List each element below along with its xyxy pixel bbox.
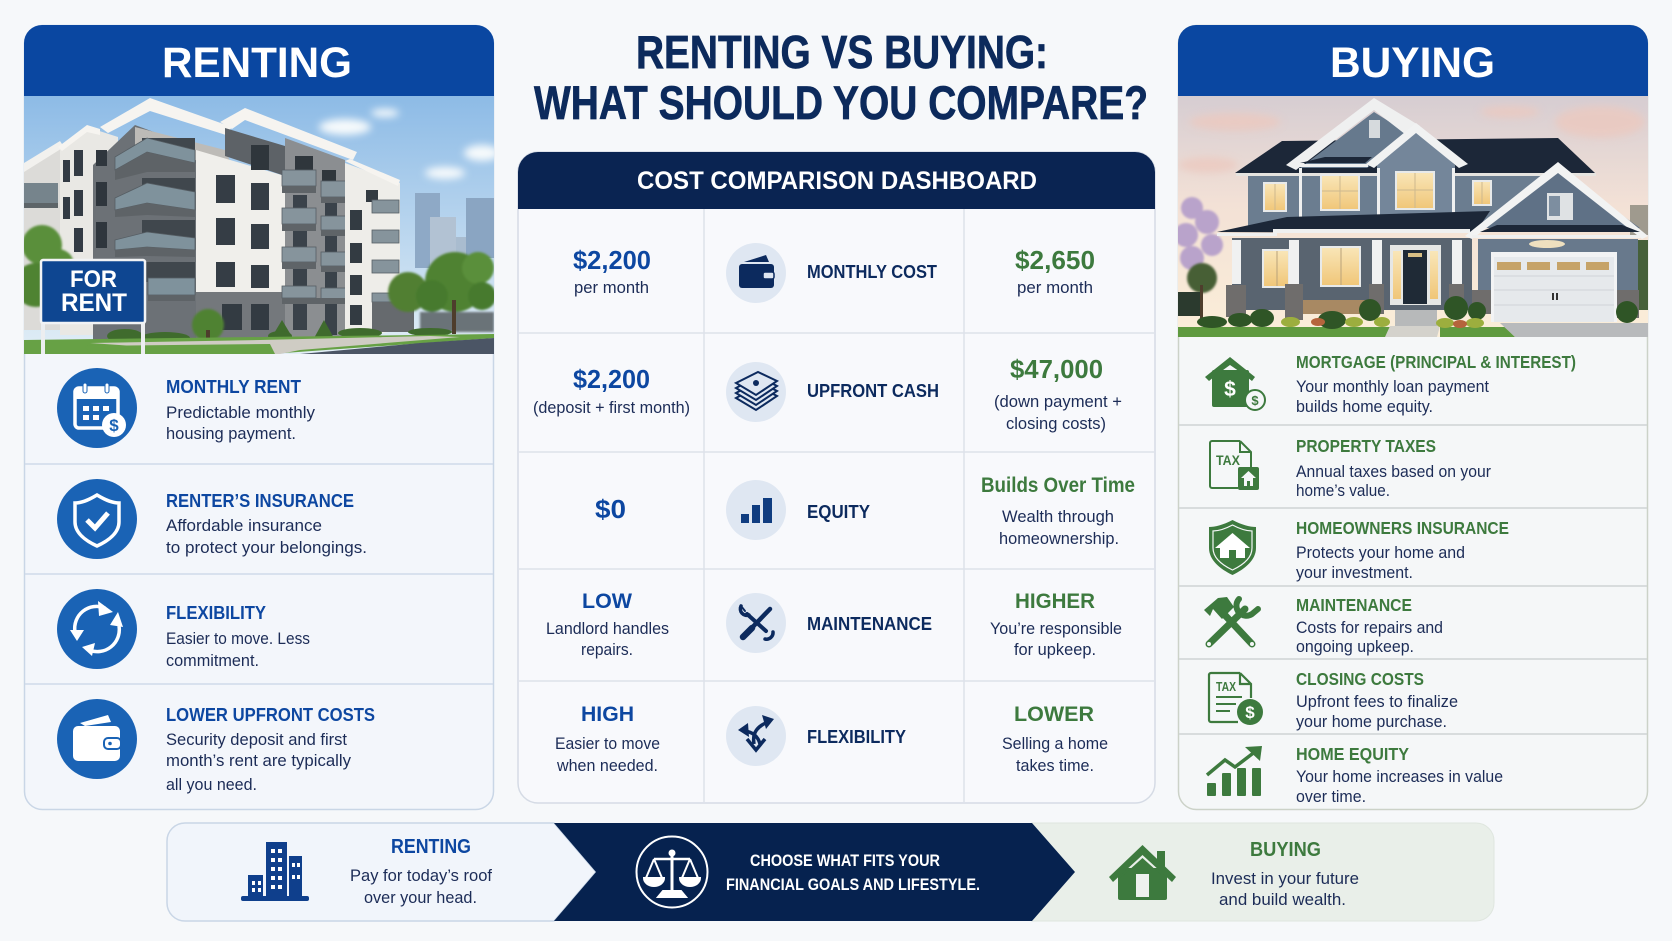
icon: cash stack xyxy=(726,362,786,422)
garden and driveway xyxy=(1395,310,1437,326)
icon: bar chart xyxy=(726,480,786,540)
banner: buying: Invest in your future xyxy=(1211,870,1359,888)
row: flexibility: commitment. xyxy=(166,652,259,670)
row: maintenance: ongoing upkeep. xyxy=(1296,638,1414,656)
icon: diverging arrows xyxy=(726,706,786,766)
row: maintenance: Costs for repairs and xyxy=(1296,619,1443,637)
icon: calendar: $ xyxy=(109,416,119,435)
trees xyxy=(1174,197,1223,270)
banner: renting: over your head. xyxy=(364,889,477,907)
illustration: suburban house xyxy=(1174,96,1648,337)
bottom banner xyxy=(167,823,1494,921)
row: renter's insurance: RENTER’S INSURANCE xyxy=(166,491,354,511)
row: property taxes: PROPERTY TAXES xyxy=(1296,436,1436,456)
for rent sign xyxy=(41,260,145,354)
row: maintenance: LOW xyxy=(582,590,632,613)
row: monthly cost: MONTHLY COST xyxy=(807,262,937,282)
row: monthly cost xyxy=(573,243,1095,303)
banner: buying: and build wealth. xyxy=(1219,891,1346,909)
icon: city buildings xyxy=(241,842,309,901)
row: upfront cash: $2,200 xyxy=(573,364,650,394)
row: upfront cash: closing costs) xyxy=(1006,415,1106,433)
row: flexibility: Easier to move xyxy=(555,735,660,753)
lower wall xyxy=(1232,238,1472,310)
icon: calendar xyxy=(57,368,137,448)
row: homeowners insurance xyxy=(1209,518,1509,582)
row: closing costs: Upfront fees to finalize xyxy=(1296,693,1458,711)
garage gable xyxy=(1480,170,1640,228)
dashboard header xyxy=(518,152,1155,209)
front gable xyxy=(1377,130,1455,216)
row: flexibility: HIGH xyxy=(581,703,634,726)
banner: choose what fits: FINANCIAL GOALS AND LIFESTYLE. xyxy=(726,876,980,894)
row: maintenance: for upkeep. xyxy=(1014,641,1096,659)
row: upfront cash: (down payment + xyxy=(994,393,1122,411)
illustration: apartment building with for rent sign xyxy=(14,96,500,354)
row: renter's insurance: to protect your belongings. xyxy=(166,539,367,557)
row: maintenance: HIGHER xyxy=(1015,590,1095,613)
banner: buying: BUYING xyxy=(1250,839,1321,861)
row: homeowners insurance: Protects your home and xyxy=(1296,544,1465,562)
trees xyxy=(14,225,496,341)
icon: wallet xyxy=(726,243,786,303)
row: lower upfront costs: all you need. xyxy=(166,776,257,794)
upper windows xyxy=(1264,172,1491,211)
row: upfront cash xyxy=(533,354,1122,433)
row: flexibility: LOWER xyxy=(1014,703,1094,726)
icon: wallet xyxy=(57,699,137,779)
icon: document with coin xyxy=(1209,673,1263,725)
white main facade xyxy=(196,150,285,292)
for rent sign: FOR xyxy=(70,266,117,293)
row: equity xyxy=(595,474,1135,548)
row: monthly cost: per month xyxy=(1017,279,1093,297)
panel: cost comparison dashboard xyxy=(518,152,1155,803)
row: lower upfront costs: LOWER UPFRONT COSTS xyxy=(166,705,375,725)
row: maintenance: repairs. xyxy=(581,641,633,659)
row: mortgage: builds home equity. xyxy=(1296,398,1433,416)
row dividers xyxy=(25,464,493,684)
panel: buying xyxy=(1174,25,1648,810)
row: upfront cash: UPFRONT CASH xyxy=(807,381,939,401)
icon: house with dollar: $ xyxy=(1251,393,1259,408)
row: monthly rent: Predictable monthly xyxy=(166,404,316,422)
row: maintenance: Landlord handles xyxy=(546,620,669,638)
skyline xyxy=(415,193,440,268)
row: property taxes: Annual taxes based on your xyxy=(1296,463,1491,481)
icon: house with dollar: $ xyxy=(1224,378,1236,401)
row: equity: homeownership. xyxy=(999,530,1119,548)
row: maintenance xyxy=(546,590,1122,659)
row: lower upfront costs: Security deposit and first xyxy=(166,731,347,749)
row: equity: Builds Over Time xyxy=(981,474,1135,497)
icon: hammer and wrench xyxy=(1204,597,1258,646)
icon: rising chart xyxy=(1207,746,1262,796)
row: flexibility: Selling a home xyxy=(1002,735,1108,753)
row: mortgage xyxy=(1205,352,1576,416)
row: closing costs: your home purchase. xyxy=(1296,713,1447,731)
banner: renting: RENTING xyxy=(391,836,471,858)
icon: tax document with house xyxy=(1210,441,1259,490)
icon: tax document with house: TAX xyxy=(1216,453,1240,468)
icon: house with dollar xyxy=(1205,357,1265,410)
buying header: BUYING xyxy=(1330,39,1495,87)
row: monthly rent: housing payment. xyxy=(166,425,296,443)
row: monthly rent xyxy=(57,368,316,448)
for rent sign: RENT xyxy=(61,289,127,317)
row: flexibility xyxy=(57,589,310,670)
icon: shield check xyxy=(57,479,137,559)
row: mortgage: Your monthly loan payment xyxy=(1296,378,1489,396)
row: equity: $0 xyxy=(595,494,626,524)
row: flexibility xyxy=(555,703,1108,775)
title: WHAT SHOULD YOU COMPARE? xyxy=(534,76,1148,129)
row: home equity: over time. xyxy=(1296,788,1366,806)
panel: renting xyxy=(14,25,500,810)
banner: choose what fits: CHOOSE WHAT FITS YOUR xyxy=(750,852,940,870)
icon: green house xyxy=(1109,845,1176,900)
row: maintenance xyxy=(1204,595,1443,656)
row: equity: Wealth through xyxy=(1002,508,1114,526)
left wing xyxy=(60,127,118,335)
banner: renting: Pay for today’s roof xyxy=(350,867,492,885)
row: renter's insurance: Affordable insurance xyxy=(166,517,322,535)
row: home equity: HOME EQUITY xyxy=(1296,744,1409,764)
row: homeowners insurance: HOMEOWNERS INSURANCE xyxy=(1296,518,1509,538)
right wing xyxy=(345,163,400,340)
title xyxy=(534,26,1148,129)
dark upper and centre section xyxy=(225,128,285,176)
row: lower upfront costs: month’s rent are typically xyxy=(166,752,352,770)
banner: choose what fits xyxy=(554,823,1075,921)
row: maintenance: MAINTENANCE xyxy=(807,614,932,634)
garage door xyxy=(1491,252,1617,322)
row: flexibility: FLEXIBILITY xyxy=(807,727,906,747)
row: monthly rent: MONTHLY RENT xyxy=(166,377,301,397)
row: maintenance: MAINTENANCE xyxy=(1296,595,1412,615)
porch roof xyxy=(1217,211,1490,233)
icon: shield with house xyxy=(1209,520,1256,575)
row: closing costs xyxy=(1209,669,1458,731)
row: flexibility: takes time. xyxy=(1016,757,1094,775)
row: upfront cash: (deposit + first month) xyxy=(533,399,690,417)
dashboard header: COST COMPARISON DASHBOARD xyxy=(637,167,1037,195)
row: renter's insurance xyxy=(57,479,367,559)
row: maintenance: You’re responsible xyxy=(990,620,1122,638)
banner: buying xyxy=(1032,823,1494,921)
row: mortgage: MORTGAGE (PRINCIPAL & INTEREST) xyxy=(1296,352,1576,372)
buying header xyxy=(1178,25,1648,96)
row: flexibility: Easier to move. Less xyxy=(166,630,310,648)
row: closing costs: CLOSING COSTS xyxy=(1296,669,1424,689)
row: monthly cost: $2,650 xyxy=(1015,245,1095,275)
row: homeowners insurance: your investment. xyxy=(1296,564,1413,582)
row: lower upfront costs xyxy=(57,699,375,794)
far left wing xyxy=(24,143,60,330)
renting header: RENTING xyxy=(162,39,352,87)
row: property taxes xyxy=(1210,436,1491,500)
grey section xyxy=(93,125,197,340)
icon: document with coin: $ xyxy=(1245,703,1255,722)
icon: balance scale xyxy=(636,836,708,908)
row: equity: EQUITY xyxy=(807,502,870,522)
row: upfront cash: $47,000 xyxy=(1010,354,1103,384)
row: home equity xyxy=(1207,744,1503,806)
main roof xyxy=(1235,138,1595,173)
title: RENTING VS BUYING: xyxy=(636,26,1048,78)
hedge, lawn and road xyxy=(107,320,452,339)
row: home equity: Your home increases in value xyxy=(1296,768,1503,786)
row: property taxes: home’s value. xyxy=(1296,482,1390,500)
row: flexibility: when needed. xyxy=(556,757,658,775)
lower windows and door xyxy=(1263,247,1360,287)
row: monthly cost: $2,200 xyxy=(573,245,651,275)
banner: renting xyxy=(167,823,596,921)
row: monthly cost: per month xyxy=(574,279,649,297)
icon: document with coin: TAX xyxy=(1216,679,1236,694)
icon: wrench and screwdriver xyxy=(726,593,786,653)
porch columns xyxy=(1232,240,1462,284)
renting header xyxy=(24,25,494,96)
upper gable xyxy=(1300,112,1412,168)
icon: circular arrows xyxy=(57,589,137,669)
row: flexibility: FLEXIBILITY xyxy=(166,603,266,623)
